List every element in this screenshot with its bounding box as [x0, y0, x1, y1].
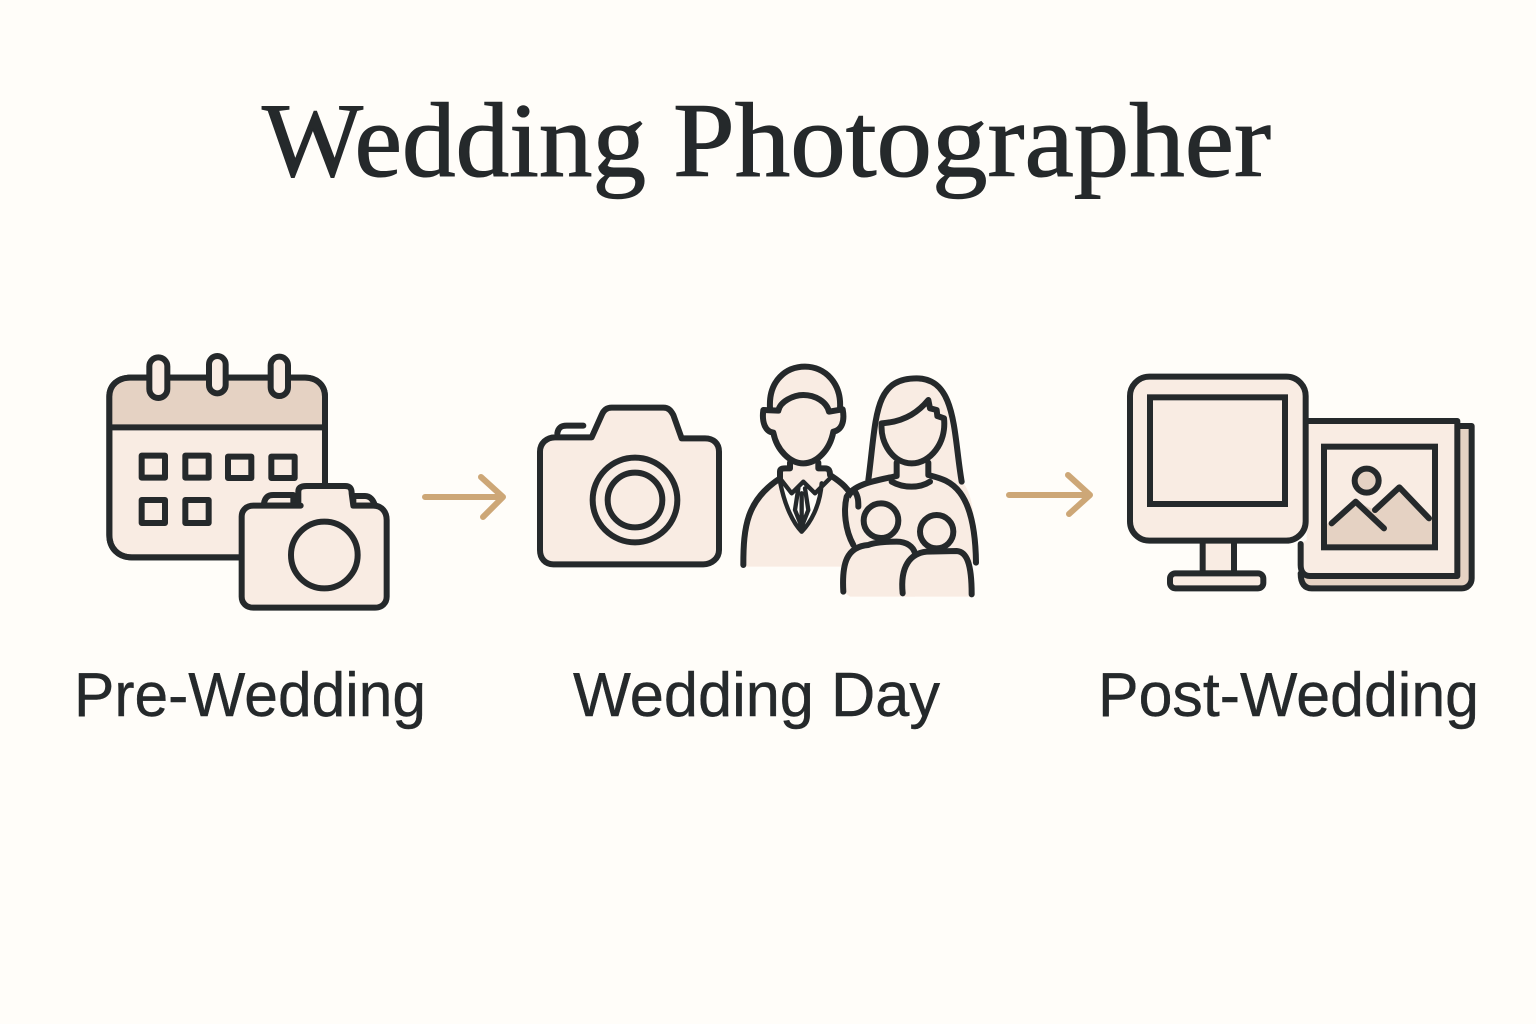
monitor stand	[1170, 540, 1263, 588]
calendar date squares	[142, 456, 295, 523]
monitor screen	[1150, 397, 1285, 504]
label: post-wedding: Post-Wedding	[1098, 661, 1479, 730]
photo with mountains	[1324, 447, 1435, 547]
groom	[743, 367, 858, 567]
label: pre-wedding: Pre-Wedding	[74, 661, 426, 730]
child one	[843, 503, 915, 597]
icon: calendar with camera	[109, 356, 387, 608]
arrow: wedding day to post-wedding	[1009, 475, 1090, 514]
shutter button	[557, 426, 583, 433]
child two	[902, 515, 972, 597]
icon: monitor and photo album	[1130, 377, 1472, 588]
title: Photographer	[673, 82, 1271, 199]
calendar body	[109, 378, 325, 557]
camera body	[540, 408, 719, 564]
title: Wedding	[262, 82, 646, 199]
album front page	[1301, 421, 1457, 576]
calendar outline	[109, 378, 325, 557]
monitor frame	[1130, 377, 1306, 541]
bride	[845, 378, 976, 563]
label: wedding day: Wedding Day	[573, 661, 940, 730]
icon: couple and children	[743, 367, 976, 597]
small camera	[242, 486, 387, 608]
album outline	[1301, 421, 1472, 588]
album back page	[1301, 426, 1472, 588]
calendar header band	[112, 380, 322, 425]
icon: large camera	[540, 408, 719, 564]
calendar rings	[149, 356, 288, 398]
arrow: pre-wedding to wedding day	[425, 477, 503, 517]
lens rings	[593, 458, 677, 542]
